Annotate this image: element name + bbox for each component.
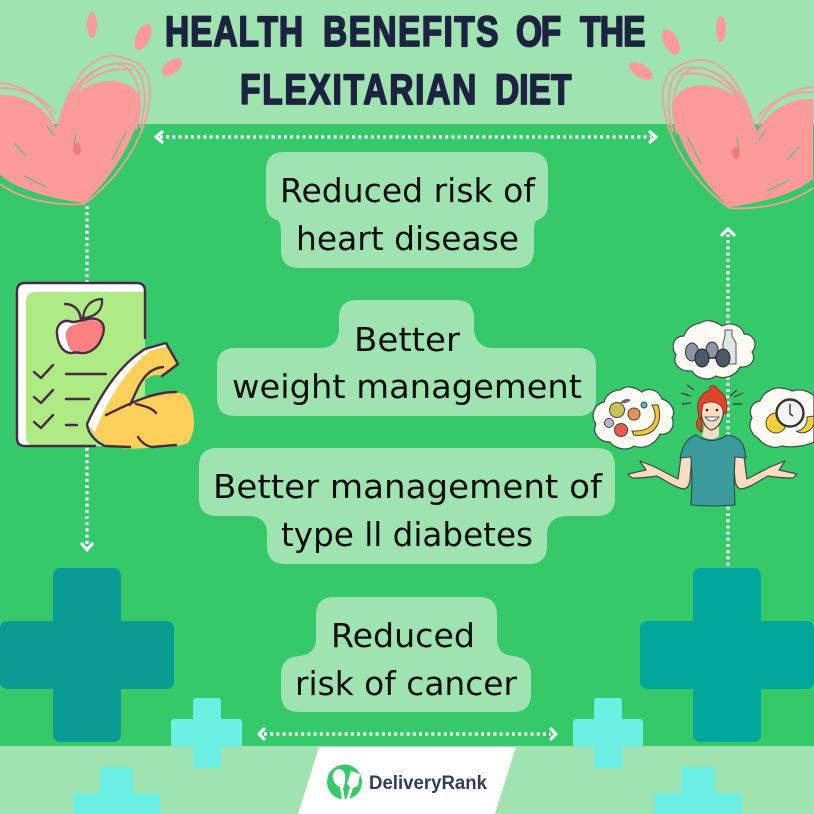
panel: reduced risk of heart disease: heart disease (296, 219, 519, 258)
checklist (34, 365, 53, 428)
title: THE (580, 8, 646, 56)
thought bubble: dumbbells and bottle (673, 321, 755, 379)
panel: better management of type II diabetes: Better management of (213, 467, 603, 506)
title: OF (516, 8, 561, 56)
panel: reduced risk of cancer: Reduced (331, 616, 475, 655)
thought bubble: sun moon and clock (750, 388, 814, 447)
hair (697, 386, 727, 432)
panel: reduced risk of cancer (281, 597, 531, 712)
panel: reduced risk of cancer: risk of cancer (295, 664, 517, 703)
title: FLEXITARIAN (240, 66, 476, 114)
arrow: bottom double-headed (259, 729, 556, 739)
panel: better weight management: weight management (232, 367, 582, 406)
arms and hands (628, 456, 692, 489)
neck (702, 424, 719, 439)
icon: large cross left (0, 568, 174, 742)
icon: small cross right (573, 698, 643, 768)
panel: reduced risk of heart disease: Reduced risk of (280, 171, 536, 210)
panel: better management of type II diabetes (199, 448, 615, 564)
top header band (0, 0, 814, 124)
flexed arm (94, 345, 194, 449)
icon: small cross left (171, 698, 242, 768)
icon: scribbled heart right (627, 16, 813, 208)
panel: better weight management: Better (354, 320, 460, 359)
icon: clipboard with apple and flexed arm (17, 283, 194, 449)
panel: better management of type II diabetes: type ll diabetes (281, 515, 533, 554)
shirt (680, 435, 746, 506)
arrow: right vertical up (722, 229, 734, 570)
panel: reduced risk of heart disease (266, 152, 548, 268)
white parallelogram (298, 747, 516, 814)
icon: large cross right (640, 568, 814, 742)
icon: spoon and fork (327, 764, 362, 800)
emphasis lines (681, 385, 743, 404)
icon: bottom cross right (654, 767, 742, 814)
arrow: left vertical down (82, 206, 92, 550)
icon: woman with thought bubbles (593, 321, 814, 506)
clipboard sheet (17, 283, 145, 446)
panel: better weight management (217, 300, 596, 416)
arrow: top double-headed (156, 132, 656, 142)
apple (57, 299, 104, 353)
title: BENEFITS (323, 8, 498, 56)
bottom footer band (0, 746, 814, 814)
logo: DeliveryRank (298, 747, 516, 814)
face (701, 398, 724, 430)
icon: scribbled heart left (0, 12, 185, 204)
icon: bottom cross left (73, 767, 160, 814)
thought bubble: fruit and vitamins (593, 387, 674, 449)
title: HEALTH (165, 8, 303, 56)
title (165, 8, 646, 114)
logo wordmark: DeliveryRank (369, 773, 487, 794)
title: DIET (495, 66, 572, 114)
